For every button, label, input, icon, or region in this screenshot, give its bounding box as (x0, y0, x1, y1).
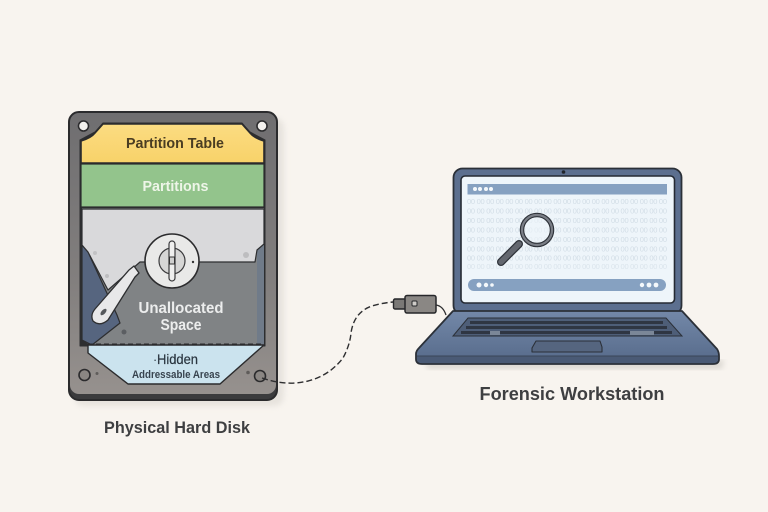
label: unallocated space (138, 300, 224, 334)
hex data rows (467, 197, 667, 271)
hex data rows: 00 00 00 00 00 00 00 00 00 00 00 00 00 00 00 00 00 00 00 00 00 (467, 262, 667, 271)
laptop lid (454, 168, 682, 314)
partitions layer (81, 164, 264, 207)
partition table layer (81, 124, 264, 163)
laptop shadow (424, 360, 724, 369)
label: unallocated space: Space (160, 317, 202, 334)
partition table layer: Partition Table (126, 135, 224, 152)
keyboard (453, 318, 682, 336)
hex data rows: 00 00 00 00 00 00 00 00 00 00 00 00 00 00 00 00 00 00 00 00 00 (467, 244, 667, 254)
screen bottom bar (468, 279, 666, 291)
label: unallocated space: Unallocated (138, 300, 224, 317)
hidden addressable areas (88, 344, 264, 384)
panel: laptop (416, 168, 724, 369)
hidden addressable areas: Hidden (157, 352, 198, 367)
label: physical hard disk: Physical Hard Disk (104, 418, 251, 437)
icon: actuator arm (92, 266, 139, 324)
connector cable (262, 302, 393, 383)
hex data rows: 00 00 00 00 00 00 00 00 00 00 00 00 00 00 00 00 00 00 00 00 00 (467, 226, 667, 234)
screen top bar (468, 184, 667, 194)
hidden addressable areas: · (153, 353, 157, 367)
icon: usb connector (394, 296, 446, 315)
icon: screws (78, 121, 267, 382)
icon: spindle (145, 234, 199, 288)
partitions layer: Partitions (142, 178, 208, 195)
hex data rows: 00 00 00 00 00 00 00 00 00 00 00 00 00 00 00 00 00 00 00 00 00 (467, 216, 667, 225)
icon: magnifying glass (501, 215, 552, 262)
hidden addressable areas: Addressable Areas (132, 369, 220, 381)
trackpad (532, 341, 602, 352)
hex data rows: 00 00 00 00 00 00 00 00 00 00 00 00 00 00 00 00 00 00 00 00 00 (467, 206, 667, 216)
label: forensic workstation: Forensic Workstation (480, 384, 664, 404)
hex data rows: 00 00 00 00 00 00 00 00 00 00 00 00 00 00 00 00 00 00 00 00 00 (467, 254, 667, 262)
panel: physical hard disk (69, 112, 284, 406)
hex data rows: 00 00 00 00 00 00 00 00 00 00 00 00 00 00 00 00 00 00 00 00 00 (467, 197, 667, 206)
hex data rows: 00 00 00 00 00 00 00 00 00 00 00 00 00 00 00 00 00 00 00 00 00 (467, 235, 667, 244)
laptop base (416, 311, 719, 364)
unallocated space layer (82, 208, 264, 345)
